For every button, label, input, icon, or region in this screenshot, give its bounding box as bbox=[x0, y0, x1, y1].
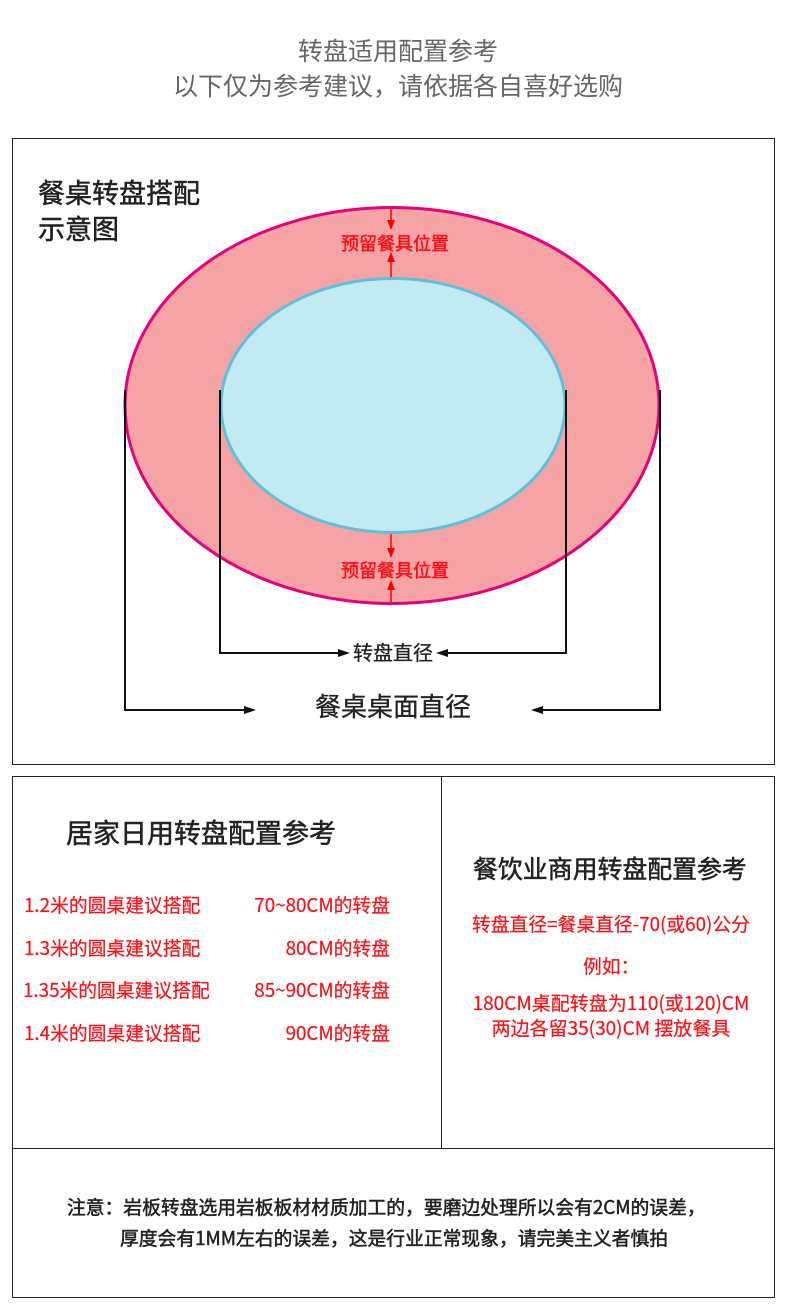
row 3 value: 85~90CM的转盘 bbox=[254, 976, 390, 1003]
commercial example: 180CM桌配转盘为110(或120)CM bbox=[473, 989, 749, 1016]
home list bbox=[23, 891, 390, 1046]
row 1 value: 70~80CM的转盘 bbox=[254, 891, 390, 918]
label: table diameter: 餐桌桌面直径 bbox=[315, 687, 471, 724]
label: reserved bottom: 预留餐具位置 bbox=[341, 557, 449, 583]
notice line 1: 注意：岩板转盘选用岩板板材材质加工的，要磨边处理所以会有2CM的误差， bbox=[67, 1193, 706, 1220]
panel: home use bbox=[12, 776, 442, 1149]
diagram: table and turntable bbox=[124, 206, 661, 714]
row 3: 1.35米的圆桌建议搭配 bbox=[23, 976, 210, 1003]
row 1: 1.2米的圆桌建议搭配 bbox=[24, 891, 200, 918]
red arrows bbox=[387, 208, 395, 603]
home heading: 居家日用转盘配置参考 bbox=[66, 812, 336, 851]
diagram heading: 示意图 bbox=[38, 208, 119, 247]
dimension arrowheads bbox=[244, 649, 543, 714]
commercial example bbox=[473, 989, 749, 1041]
title: 转盘适用配置参考 bbox=[298, 32, 498, 68]
commercial example label: 例如： bbox=[583, 952, 639, 979]
diagram heading bbox=[38, 172, 200, 247]
diagram heading: 餐桌转盘搭配 bbox=[38, 172, 200, 211]
dimension lines bbox=[125, 390, 660, 710]
turntable ellipse bbox=[221, 278, 565, 532]
panel: diagram bbox=[12, 138, 775, 765]
label: turntable diameter: 转盘直径 bbox=[353, 637, 433, 666]
commercial formula: 转盘直径=餐桌直径-70(或60)公分 bbox=[472, 910, 750, 937]
row 2 value: 80CM的转盘 bbox=[286, 934, 390, 961]
title bbox=[173, 32, 623, 103]
row 4: 1.4米的圆桌建议搭配 bbox=[24, 1019, 200, 1046]
label: reserved top: 预留餐具位置 bbox=[341, 230, 449, 256]
commercial heading: 餐饮业商用转盘配置参考 bbox=[473, 850, 747, 886]
commercial example: 两边各留35(30)CM 摆放餐具 bbox=[492, 1014, 730, 1041]
row 4 value: 90CM的转盘 bbox=[286, 1019, 390, 1046]
row 2: 1.3米的圆桌建议搭配 bbox=[24, 934, 200, 961]
panel: notice bbox=[12, 1148, 775, 1298]
table ellipse bbox=[125, 208, 659, 604]
notice line 2: 厚度会有1MM左右的误差，这是行业正常现象，请完美主义者慎拍 bbox=[120, 1224, 668, 1251]
title: 以下仅为参考建议，请依据各自喜好选购 bbox=[173, 67, 623, 103]
notice text bbox=[67, 1193, 706, 1251]
panel: commercial bbox=[441, 776, 775, 1149]
